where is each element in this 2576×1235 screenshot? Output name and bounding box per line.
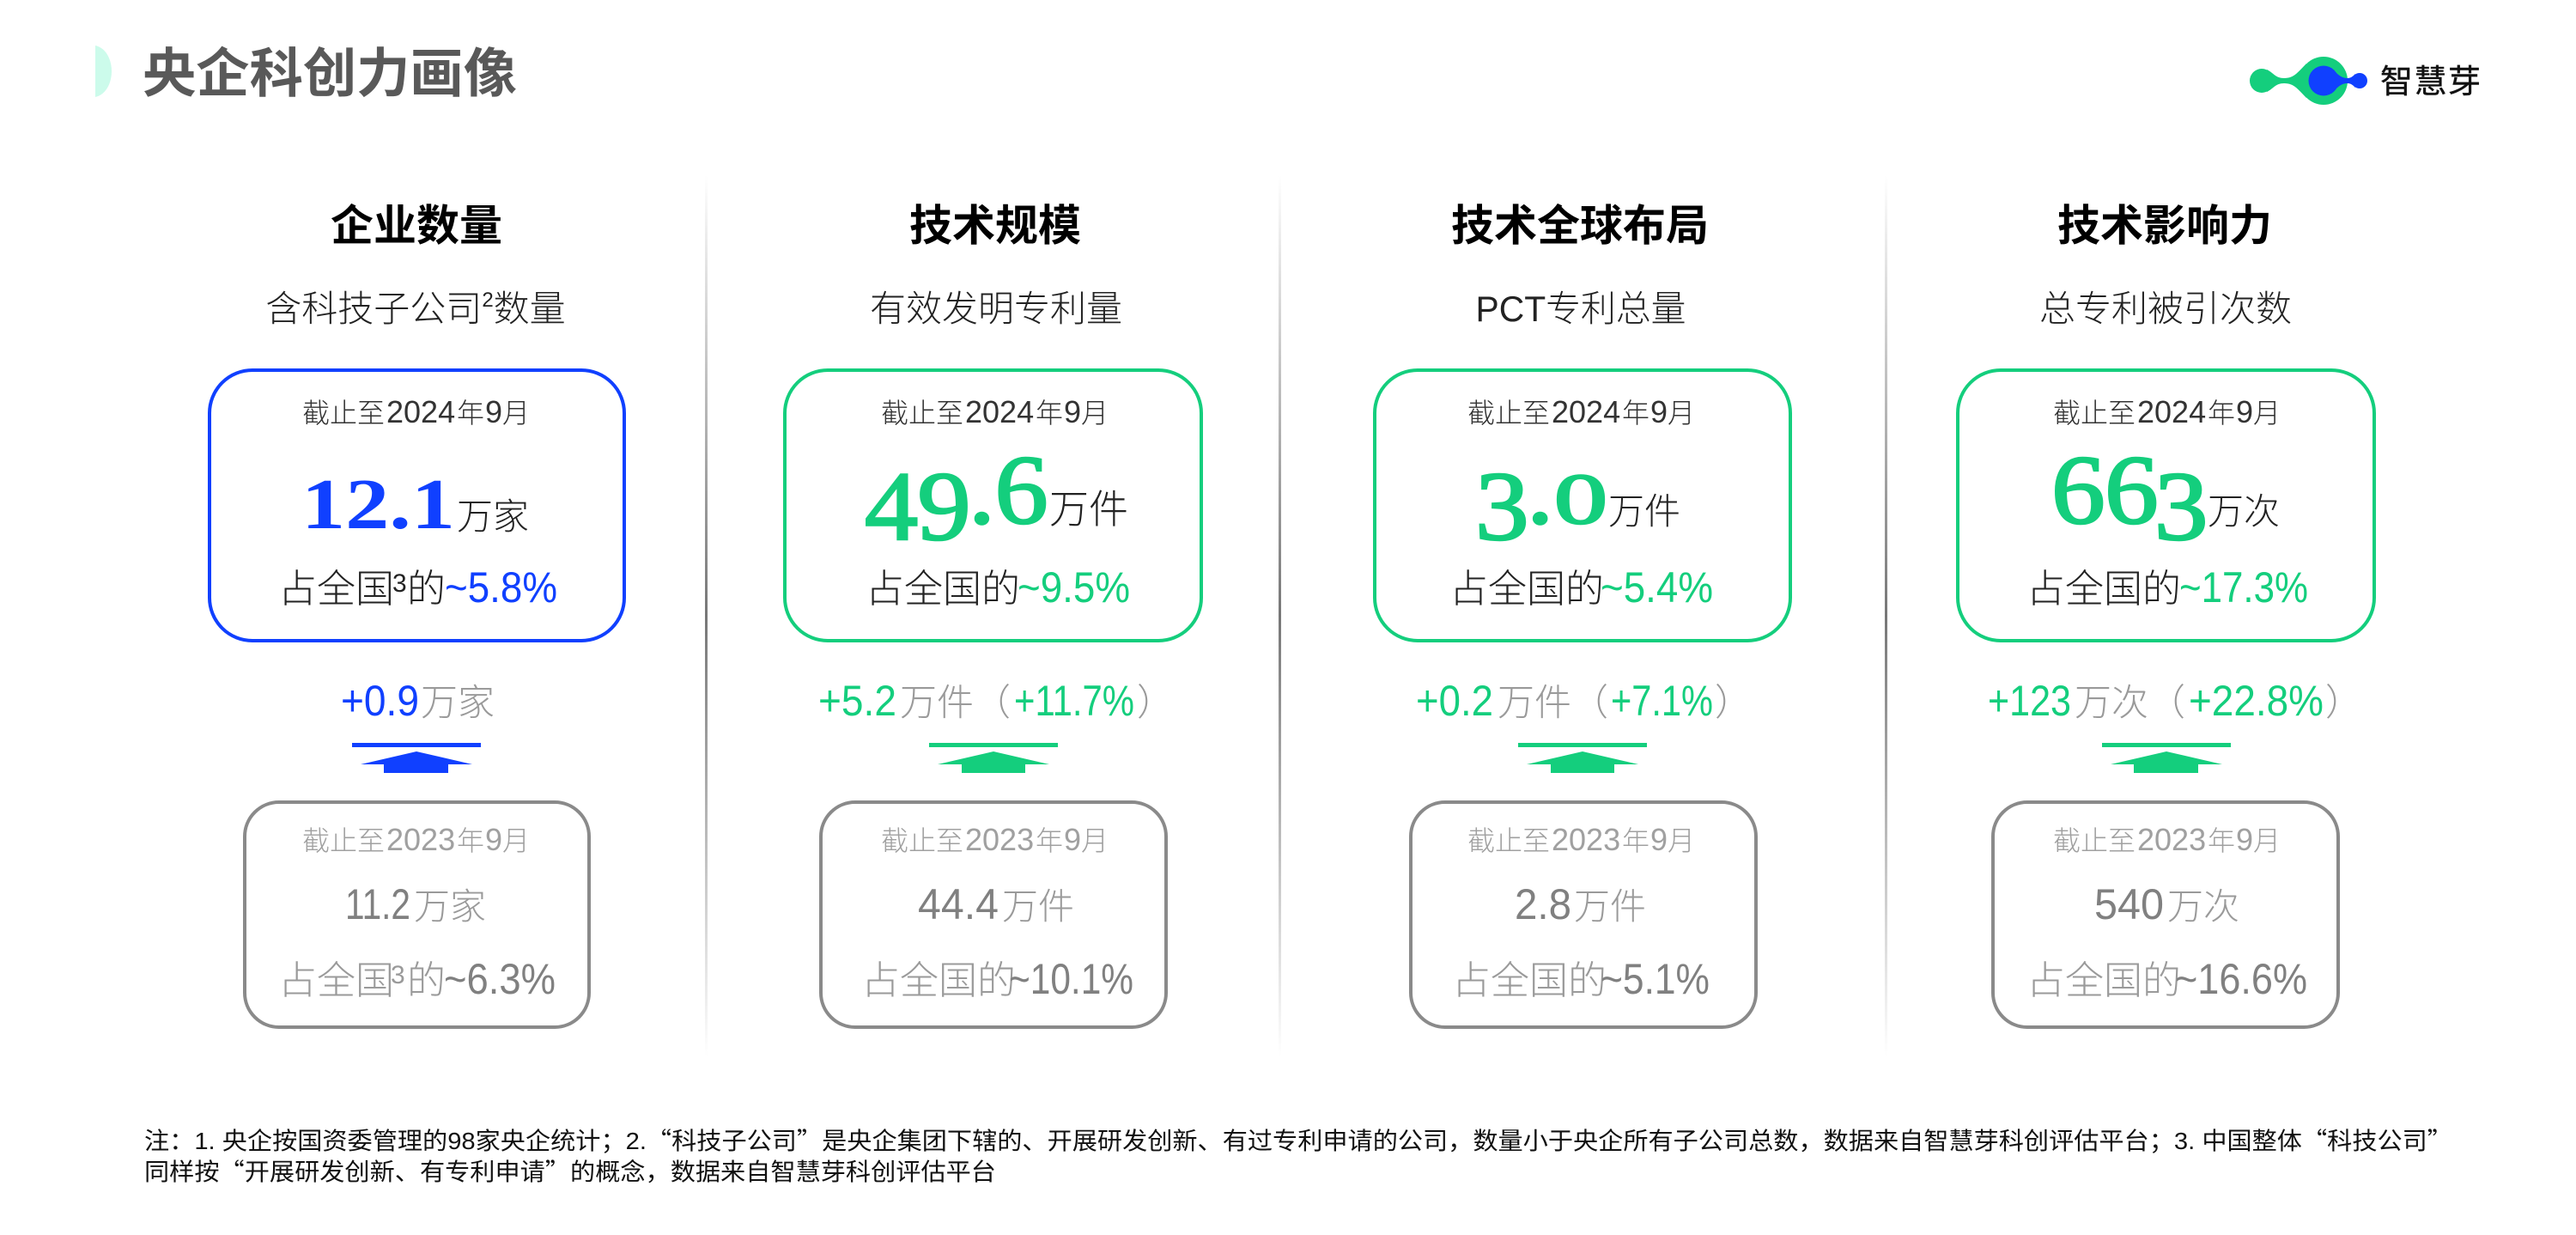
- previous value card: 2023: [386, 822, 455, 857]
- current value card: 49.6: [865, 436, 1048, 561]
- current value card: 万件: [1049, 487, 1128, 532]
- previous value card: 万件: [1002, 886, 1074, 927]
- growth value: ）: [1715, 683, 1752, 724]
- current value card: 月: [502, 398, 530, 429]
- previous value card: 3: [391, 961, 405, 989]
- previous value card: 的: [407, 958, 446, 1002]
- current value card: 663: [2051, 435, 2208, 561]
- previous value card: [1411, 802, 1756, 1027]
- heading: 技术全球布局: [1451, 202, 1709, 250]
- title: 央企科创力画像: [143, 45, 517, 104]
- previous value card: 月: [502, 825, 530, 856]
- current value card: 截止至: [302, 398, 385, 429]
- growth value: ）: [1137, 683, 1174, 724]
- current value card: 万次: [2208, 491, 2280, 532]
- previous value card: 月: [2253, 825, 2281, 856]
- current value card: 2024: [2137, 394, 2206, 429]
- previous value card: 年: [2208, 825, 2235, 856]
- footnote: [144, 1122, 2452, 1188]
- current value card: 3: [392, 569, 407, 598]
- panel: 企业数量: [210, 202, 624, 1027]
- previous value card: ~10.1%: [1009, 955, 1133, 1003]
- growth value: ）: [2325, 683, 2362, 724]
- growth value: +7.1%: [1611, 677, 1713, 725]
- current value card: [785, 370, 1201, 641]
- heading: 企业数量: [331, 202, 502, 250]
- growth value: +0.9: [341, 677, 419, 725]
- current value card: 截止至: [1467, 398, 1550, 429]
- previous value card: 年: [457, 825, 484, 856]
- current value card: [1375, 370, 1790, 641]
- arrow up: [2102, 743, 2231, 773]
- current value card: 2024: [1552, 394, 1620, 429]
- current value card: ~9.5%: [1018, 563, 1130, 611]
- arrow up: [929, 743, 1058, 773]
- previous value card: 2.8: [1515, 880, 1571, 928]
- current value card: 截止至: [2053, 398, 2136, 429]
- growth value: +5.2: [818, 677, 896, 725]
- previous value card: [1993, 802, 2338, 1027]
- current value card: 2024: [386, 394, 455, 429]
- previous value card: [821, 802, 1166, 1027]
- current value card: 9: [2236, 394, 2253, 429]
- heading: 技术影响力: [2057, 202, 2272, 250]
- previous value card: 2023: [2137, 822, 2206, 857]
- current value card: 截止至: [881, 398, 963, 429]
- subheading: 总专利被引次数: [2039, 289, 2292, 329]
- growth value: 万件（: [900, 683, 1011, 724]
- current value card: 占全国的: [2026, 567, 2181, 611]
- panel: 技术规模: [785, 202, 1201, 1027]
- previous value card: 年: [1036, 825, 1063, 856]
- previous value card: 占全国: [278, 958, 394, 1002]
- panel: 技术影响力: [1958, 202, 2374, 1027]
- previous value card: 月: [1081, 825, 1109, 856]
- divider 3: [1885, 175, 1887, 1056]
- current value card: 占全国的: [866, 567, 1020, 611]
- previous value card: 9: [1064, 822, 1081, 857]
- growth value: 万次（: [2075, 683, 2185, 724]
- previous value card: 截止至: [881, 825, 963, 856]
- footnote: 注：1. 央企按国资委管理的98家央企统计；2. “科技子公司”是央企集团下辖的、开展研发创新、有过专利申请的公司，数量小于央企所有子公司总数，数据来自智慧芽科创评估平台；3. 中国整体 “科技公司”: [144, 1122, 2452, 1157]
- current value card: 年: [1622, 398, 1649, 429]
- growth value: 万件（: [1498, 683, 1608, 724]
- previous value card: 占全国的: [861, 958, 1016, 1002]
- current value card: ~5.4%: [1601, 563, 1713, 611]
- previous value card: 万家: [414, 886, 486, 927]
- previous value card: 月: [1668, 825, 1695, 856]
- previous value card: [245, 802, 589, 1027]
- current value card: 12.1: [301, 465, 455, 544]
- growth value: [1988, 677, 2362, 725]
- arrow up: [1518, 743, 1647, 773]
- current value card: 9: [1650, 394, 1668, 429]
- subheading: 2: [482, 289, 494, 312]
- previous value card: ~5.1%: [1601, 955, 1710, 1003]
- current value card: 0: [1554, 459, 1607, 539]
- current value card: [210, 370, 624, 641]
- current value card: 月: [2253, 398, 2281, 429]
- previous value card: ~16.6%: [2175, 955, 2307, 1003]
- previous value card: 2023: [1552, 822, 1620, 857]
- growth value: +22.8%: [2189, 677, 2324, 725]
- current value card: 年: [2208, 398, 2235, 429]
- previous value card: 占全国的: [2026, 958, 2181, 1002]
- previous value card: 540: [2094, 880, 2164, 928]
- growth value: +11.7%: [1014, 677, 1134, 725]
- current value card: 的: [407, 567, 446, 611]
- logo: 智慧芽: [2250, 57, 2482, 105]
- current value card: 万件: [1608, 491, 1680, 532]
- current value card: 9: [1064, 394, 1081, 429]
- growth value: [341, 677, 495, 725]
- current value card: 占全国: [278, 567, 394, 611]
- current value card: 月: [1668, 398, 1695, 429]
- current value card: 2024: [965, 394, 1034, 429]
- title accent: [95, 46, 112, 97]
- logo: 智慧芽: 智慧芽: [2380, 64, 2482, 100]
- current value card: 月: [1081, 398, 1109, 429]
- divider 2: [1279, 175, 1281, 1056]
- previous value card: 万次: [2167, 886, 2239, 927]
- previous value card: 截止至: [302, 825, 385, 856]
- growth value: 万家: [421, 683, 495, 724]
- current value card: 占全国的: [1449, 567, 1604, 611]
- growth value: +123: [1988, 677, 2071, 725]
- current value card: ~5.8%: [445, 563, 557, 611]
- previous value card: 万件: [1574, 886, 1646, 927]
- current value card: 年: [1036, 398, 1063, 429]
- previous value card: 9: [485, 822, 502, 857]
- heading: 技术规模: [909, 202, 1081, 250]
- growth value: [818, 677, 1174, 725]
- previous value card: 9: [1650, 822, 1668, 857]
- growth value: +0.2: [1416, 677, 1493, 725]
- previous value card: 11.2: [345, 880, 410, 928]
- previous value card: 44.4: [918, 880, 999, 928]
- divider 1: [705, 175, 708, 1056]
- current value card: 9: [485, 394, 502, 429]
- current value card: 年: [457, 398, 484, 429]
- previous value card: 9: [2236, 822, 2253, 857]
- previous value card: 截止至: [2053, 825, 2136, 856]
- previous value card: 截止至: [1467, 825, 1550, 856]
- previous value card: 年: [1622, 825, 1649, 856]
- current value card: 3.: [1475, 435, 1553, 561]
- subheading: 含科技子公司: [265, 289, 482, 329]
- current value card: ~17.3%: [2179, 563, 2308, 611]
- subheading: 有效发明专利量: [870, 289, 1122, 329]
- current value card: 万家: [457, 496, 529, 537]
- current value card: [1958, 370, 2374, 641]
- footnote: 同样按“开展研发创新、有专利申请 ”的概念，数据来自智慧芽科创评估平台: [144, 1153, 996, 1188]
- subheading: PCT专利总量: [1475, 289, 1686, 329]
- subheading: 数量: [494, 289, 566, 329]
- panel: 技术全球布局: [1375, 202, 1790, 1027]
- previous value card: 占全国的: [1452, 958, 1607, 1002]
- arrow up: [352, 743, 481, 773]
- previous value card: ~6.3%: [444, 955, 556, 1003]
- previous value card: 2023: [965, 822, 1034, 857]
- growth value: [1416, 677, 1752, 725]
